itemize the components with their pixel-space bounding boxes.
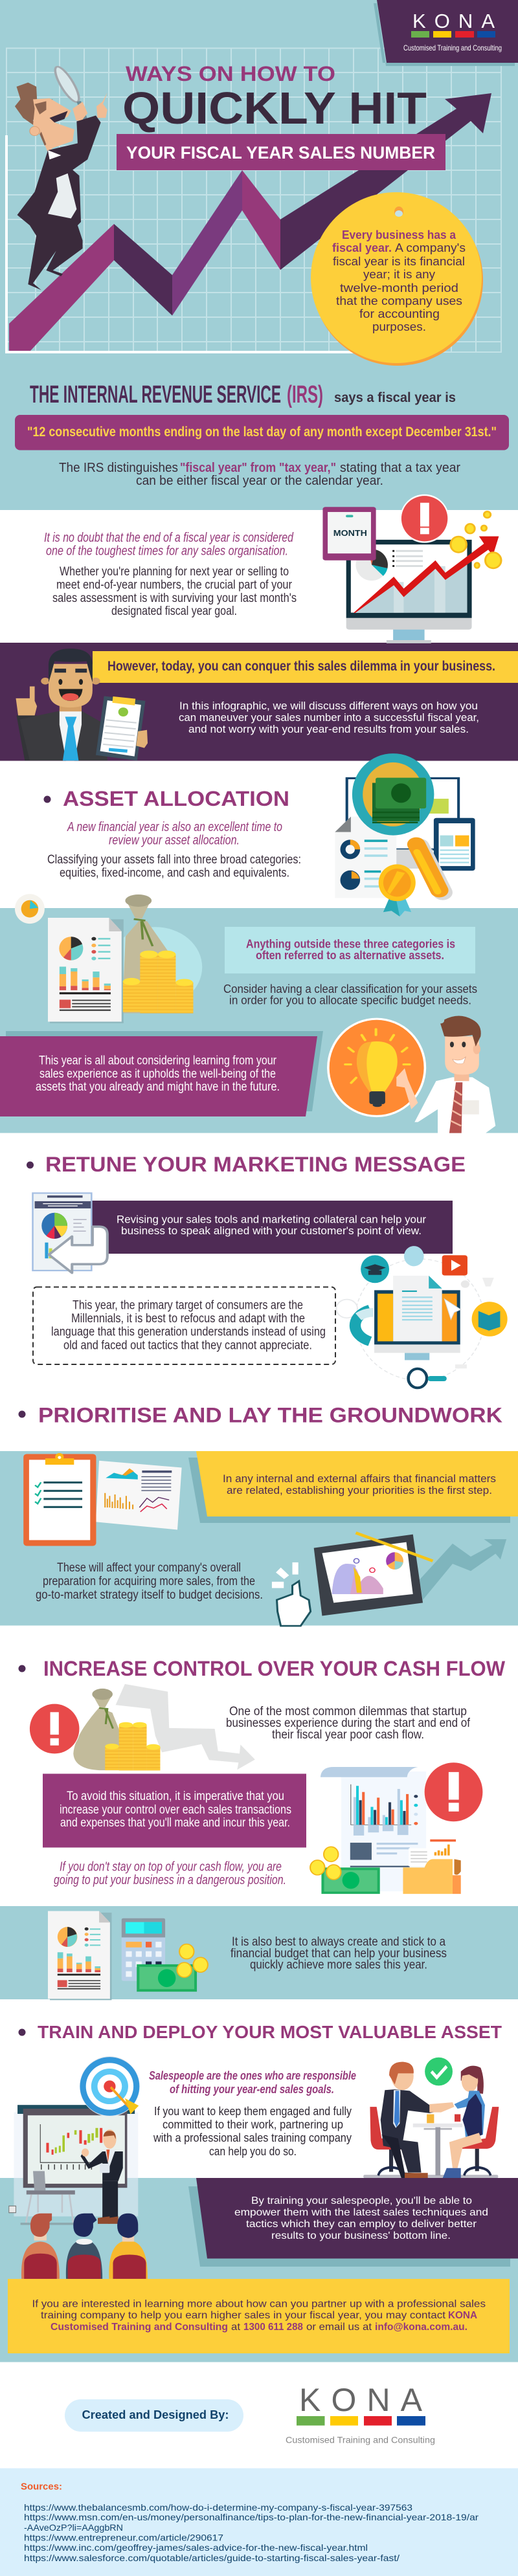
panel: contact call to action: at xyxy=(231,2322,241,2333)
panel: prioritise and lay the groundwork xyxy=(18,1403,518,1626)
text: keep them engaged: can help you do so. xyxy=(209,2145,297,2158)
text: three broad categories xyxy=(47,853,301,880)
band: revising your sales tools: business to speak aligned with your customer's point of view. xyxy=(121,1225,422,1237)
panel: by training your salespeople xyxy=(188,2178,518,2267)
text: these will affect your company xyxy=(36,1561,263,1602)
text: italic warning: going to put your business in a dangerous position. xyxy=(54,1873,286,1887)
text: financial budget: quickly achieve more sales this year. xyxy=(250,1959,427,1971)
panel: train and deploy your most valuable asset xyxy=(18,2022,502,2178)
text: italic lead: It is no doubt that the end of a fiscal year is considered xyxy=(44,531,294,545)
panel: conquer the dilemma xyxy=(16,649,518,761)
illustration: report, alert, money and folder xyxy=(310,1762,483,1894)
panel: alternative assets xyxy=(0,894,495,1133)
banner: this year is all about learning: sales experience as it upholds the well-being of the xyxy=(39,1067,276,1081)
text: common dilemmas xyxy=(226,1705,471,1742)
text: keep them engaged: committed to their work, partnering up xyxy=(163,2118,343,2131)
illustration: businessman with magnifying glass xyxy=(15,65,107,290)
callout: anything outside these three categories xyxy=(225,927,475,973)
callout: every business has a fiscal year: for accounting xyxy=(359,307,440,320)
illustration: light bulb and man giving thumbs up xyxy=(327,1016,495,1133)
callout: every business has a fiscal year: that the company uses xyxy=(336,294,462,307)
text: in this infographic xyxy=(179,700,479,735)
illustration: report, calculator and money xyxy=(48,1911,208,2000)
heading: asset allocation: ASSET ALLOCATION xyxy=(63,787,289,810)
banner: this year is all about learning: assets that you already and might have in the future. xyxy=(36,1080,280,1094)
callout: anything outside these three categories: Anything outside these three categories is xyxy=(246,937,455,950)
panel: contact call to action: Customised Training and Consulting xyxy=(51,2322,228,2333)
text: financial budget: financial budget that can help your business xyxy=(231,1947,447,1960)
panel: financial budget xyxy=(48,1911,447,2000)
panel: asset allocation xyxy=(44,753,475,916)
text: italic warning xyxy=(54,1860,286,1887)
box: to avoid this situation xyxy=(43,1773,306,1847)
yellow panel: establishing priorities: are related, establishing your priorities is the first step. xyxy=(227,1484,492,1496)
text: italic lead: Salespeople are the ones who are responsible xyxy=(149,2069,356,2082)
banner: this year is all about learning: This year is all about considering learning from your xyxy=(39,1054,277,1068)
panel: sources xyxy=(21,2482,479,2563)
text: body: meet end-of-year numbers, the crucial part of your xyxy=(56,579,293,592)
text: IRS distinguishes fiscal year from tax year: The IRS distinguishes xyxy=(59,461,178,475)
source links: -AAveOzP?li=AAggbRN xyxy=(24,2522,123,2533)
illustration: monitor with learning icons xyxy=(336,1246,508,1388)
quote box xyxy=(15,415,509,450)
panel: by training your salespeople: empower them with the latest sales techniques and xyxy=(234,2207,488,2218)
heading: the internal revenue service: THE INTERNAL REVENUE SERVICE xyxy=(30,381,281,408)
yellow panel: establishing priorities xyxy=(188,1451,518,1523)
text: italic warning: If you don't stay on top of your cash flow, you are xyxy=(60,1860,282,1874)
text: says a fiscal year is: says a fiscal year is xyxy=(334,390,456,405)
panel: contact call to action: training company to help you earn higher sales in your fiscal year, you may contact xyxy=(41,2310,446,2321)
dashed text box: Millennials, it is best to refocus and adapt with the xyxy=(71,1312,305,1326)
text: IRS distinguishes fiscal year from tax year: can be either fiscal year or the calendar year. xyxy=(136,474,383,488)
callout: every business has a fiscal year: fiscal year. xyxy=(332,241,392,254)
heading: retune your marketing message: RETUNE YOUR MARKETING MESSAGE xyxy=(45,1153,466,1176)
text: italic lead xyxy=(44,531,294,558)
panel: hero xyxy=(6,0,518,366)
callout: every business has a fiscal year: Every business has a xyxy=(342,228,456,241)
text: three broad categories: equities, fixed-income, and cash and equivalents. xyxy=(60,866,289,880)
text: consider having a clear classification: in order for you to allocate specific budget needs. xyxy=(229,994,471,1007)
text: three broad categories: Classifying your assets fall into three broad categories: xyxy=(47,853,301,867)
illustration: clipboard checklist and report xyxy=(23,1453,182,1546)
text: financial budget xyxy=(231,1935,447,1971)
panel: contact call to action xyxy=(8,2279,510,2353)
box: to avoid this situation: To avoid this situation, it is imperative that you xyxy=(67,1790,284,1803)
panel: end of fiscal year intro xyxy=(44,494,501,643)
text: common dilemmas: One of the most common dilemmas that startup xyxy=(229,1705,467,1718)
band: revising your sales tools: Revising your sales tools and marketing collateral can help your xyxy=(117,1213,426,1226)
logo: kona xyxy=(374,0,518,66)
panel: contact call to action: info@kona.com.au. xyxy=(375,2322,467,2333)
panel: contact call to action: If you are interested in learning more about how can you partner up with a professional sales xyxy=(32,2299,486,2309)
dashed text box xyxy=(33,1287,335,1364)
text: common dilemmas: businesses experience during the start and end of xyxy=(226,1716,471,1730)
source links: https://www.salesforce.com/quotable/articles/guide-to-starting-fiscal-sales-year-fast/ xyxy=(24,2553,400,2563)
title band: YOUR FISCAL YEAR SALES NUMBER xyxy=(126,143,435,162)
text: keep them engaged: If you want to keep them engaged and fully xyxy=(154,2105,352,2118)
text: consider having a clear classification xyxy=(223,983,477,1007)
rising zigzag arrow xyxy=(9,93,491,351)
illustration: man holding clipboard xyxy=(16,649,148,761)
dashed text box: old and faced out tactics that they cannot appreciate. xyxy=(63,1338,312,1353)
text: IRS distinguishes fiscal year from tax year: "fiscal year" from "tax year," xyxy=(180,461,336,475)
text: in this infographic: In this infographic, we will discuss different ways on how you xyxy=(179,700,478,712)
source links: https://www.thebalancesmb.com/how-do-i-determine-my-company-s-fiscal-year-397563 xyxy=(24,2502,412,2513)
pill: created and designed by xyxy=(65,2399,243,2432)
callout: anything outside these three categories: often referred to as alternative assets. xyxy=(256,949,444,962)
text: italic lead xyxy=(67,820,282,848)
banner: this year is all about learning xyxy=(0,1031,323,1116)
pill: created and designed by: Created and Designed By: xyxy=(82,2408,229,2421)
heading: prioritise and lay the groundwork: PRIORITISE AND LAY THE GROUNDWORK xyxy=(38,1403,502,1427)
heading: train and deploy: TRAIN AND DEPLOY YOUR MOST VALUABLE ASSET xyxy=(38,2022,502,2042)
logo: kona: KONA xyxy=(412,10,495,32)
yellow banner xyxy=(93,651,518,683)
text: italic lead xyxy=(149,2069,356,2096)
panel: retune your marketing message xyxy=(27,1153,508,1388)
illustration: alert, money bag and falling arrow xyxy=(29,1684,255,1770)
illustration: monitor with rising red arrow: MONTH xyxy=(333,529,367,539)
chart grid xyxy=(6,48,501,352)
illustration: report, money bag and coins xyxy=(15,894,202,1023)
panel: increase control over your cash flow xyxy=(18,1657,506,1894)
chart axis xyxy=(6,135,354,352)
heading: increase control over your cash flow: INCREASE CONTROL OVER YOUR CASH FLOW xyxy=(43,1657,506,1680)
callout: every business has a fiscal year: fiscal year is its financial xyxy=(333,255,465,268)
text: IRS distinguishes fiscal year from tax year xyxy=(59,461,460,488)
illustration: report with return arrow xyxy=(33,1193,107,1273)
dashed text box: language that this generation understands instead of using xyxy=(51,1326,326,1338)
logo: kona footer: KONA xyxy=(299,2382,423,2418)
panel: contact call to action: KONA xyxy=(448,2310,477,2321)
text: in this infographic: can maneuver your sales number into a successful fiscal year, xyxy=(179,711,479,724)
text: these will affect your company: preparation for acquiring more sales, from the xyxy=(43,1575,255,1588)
source links: https://www.entrepreneur.com/article/290617 xyxy=(24,2532,223,2542)
heading: the internal revenue service xyxy=(30,381,323,408)
text: IRS distinguishes fiscal year from tax year: stating that a tax year xyxy=(340,461,460,475)
text: body: Whether you're planning for next year or selling to xyxy=(60,565,289,579)
panel: empower your salespeople xyxy=(8,2056,518,2353)
source links xyxy=(24,2502,479,2563)
illustration: monitor with rising red arrow xyxy=(322,494,501,643)
panel: credits xyxy=(65,2382,435,2445)
title line: quickly hit: QUICKLY HIT xyxy=(122,83,427,133)
text: common dilemmas: their fiscal year poor cash flow. xyxy=(272,1728,424,1742)
text: these will affect your company: go-to-market strategy itself to budget decisions. xyxy=(36,1588,263,1602)
illustration: magnifier over cash and documents xyxy=(335,753,475,916)
illustration: presenter with audience xyxy=(9,2056,148,2279)
text: body: sales assessment is with surviving your last month's xyxy=(52,592,297,605)
callout: every business has a fiscal year: purposes. xyxy=(372,320,426,333)
title line: ways on how to: WAYS ON HOW TO xyxy=(126,62,335,85)
callout: every business has a fiscal year: A company's xyxy=(395,241,466,254)
text: italic lead: one of the toughest times for any sales organisation. xyxy=(46,544,288,558)
callout: every business has a fiscal year xyxy=(311,192,483,366)
band: revising your sales tools xyxy=(91,1201,453,1254)
callout: every business has a fiscal year: twelve-month period xyxy=(340,282,458,294)
text: these will affect your company: These will affect your company's overall xyxy=(57,1561,241,1575)
heading: the internal revenue service: (IRS) xyxy=(287,381,323,408)
source links: https://www.msn.com/en-us/money/personalfinance/tips-to-plan-for-the-new-financial-year-2018-19/ar xyxy=(24,2512,479,2522)
dashed text box: This year, the primary target of consumers are the xyxy=(73,1298,303,1313)
text: keep them engaged xyxy=(153,2105,352,2158)
panel: by training your salespeople: By training your salespeople, you'll be able to xyxy=(251,2195,472,2206)
text: italic lead: A new financial year is also an excellent time to xyxy=(67,820,282,834)
title band xyxy=(117,134,445,170)
callout: every business has a fiscal year: year; it is any xyxy=(363,268,435,281)
panel: contact call to action: 1300 611 288 xyxy=(243,2322,303,2333)
text: body: designated fiscal year goal. xyxy=(111,605,237,618)
logo: kona footer xyxy=(286,2382,435,2445)
panel: by training your salespeople: results to your business' bottom line. xyxy=(271,2230,451,2241)
text: keep them engaged: with a professional sales training company xyxy=(153,2131,352,2144)
panel: IRS definition xyxy=(15,381,509,488)
heading: sources: Sources: xyxy=(21,2482,62,2492)
illustration: tablet with charts, pointer and arrow xyxy=(272,1533,506,1626)
text: italic lead: review your asset allocation. xyxy=(109,834,240,848)
yellow panel: establishing priorities: In any internal and external affairs that financial matters xyxy=(223,1472,496,1485)
text: consider having a clear classification: Consider having a clear classification for your assets xyxy=(223,983,477,995)
box: to avoid this situation: increase your control over each sales transactions xyxy=(60,1803,291,1817)
text: italic lead: of hitting your year-end sales goals. xyxy=(170,2083,334,2096)
text: body xyxy=(52,565,297,618)
source links: https://www.inc.com/geoffrey-james/sales-advice-for-the-new-fiscal-year.html xyxy=(24,2542,368,2553)
panel: contact call to action: or email us at xyxy=(306,2322,372,2333)
panel: by training your salespeople: tactics which they can employ to deliver better xyxy=(246,2219,477,2230)
illustration: handshake meeting xyxy=(363,2058,499,2178)
text: financial budget: It is also best to always create and stick to a xyxy=(232,1935,445,1949)
box: to avoid this situation: and expenses that you'll make and incur this year. xyxy=(60,1816,290,1830)
text: in this infographic: and not worry with your year-end results from your sales. xyxy=(188,723,469,735)
logo: kona footer: Customised Training and Consulting xyxy=(286,2435,435,2445)
